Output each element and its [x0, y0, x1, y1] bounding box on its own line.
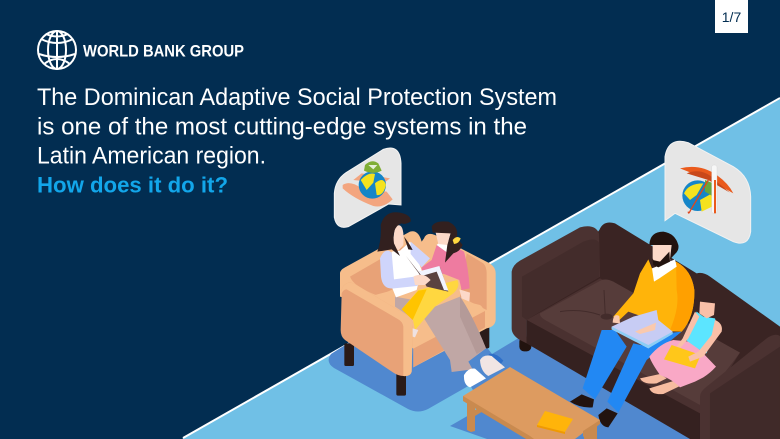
page counter badge: [715, 0, 748, 33]
armchair and mother with daughter: [340, 212, 505, 396]
icon: globe: [38, 31, 76, 69]
icon: earth globe: [682, 180, 713, 212]
open book on father's lap: [612, 310, 673, 348]
armchair: [340, 231, 496, 396]
logo wordmark: WORLD BANK GROUP: [83, 42, 244, 60]
light blue floor: [182, 99, 780, 439]
rug under the furniture: [329, 310, 780, 439]
headline text: [37, 84, 557, 170]
coffee table with book: [463, 367, 600, 439]
page counter badge: 1/7: [722, 9, 741, 25]
mother: [377, 212, 505, 387]
brown sofa: [512, 222, 780, 439]
icon: orange book on table: [537, 411, 573, 434]
highlighted question: How does it do it?: [37, 172, 228, 198]
headline text: The Dominican Adaptive Social Protection System: [37, 84, 557, 111]
girl in pink dress: [640, 302, 722, 394]
speech bubble: umbrella, earth and thermometer: [665, 141, 751, 243]
World Bank Group logo: [38, 31, 244, 69]
icon: open hand: [343, 173, 393, 206]
daughter: [402, 221, 470, 337]
open book held by mother: [406, 256, 448, 292]
speech bubble: hands holding earth: [334, 148, 401, 227]
icon: orange umbrella: [680, 167, 733, 213]
headline text: is one of the most cutting-edge systems in the: [37, 114, 527, 140]
icon: thermometer: [712, 165, 717, 213]
father reading: [570, 232, 694, 427]
headline text: Latin American region.: [37, 142, 266, 170]
icon: earth globe: [359, 161, 386, 199]
